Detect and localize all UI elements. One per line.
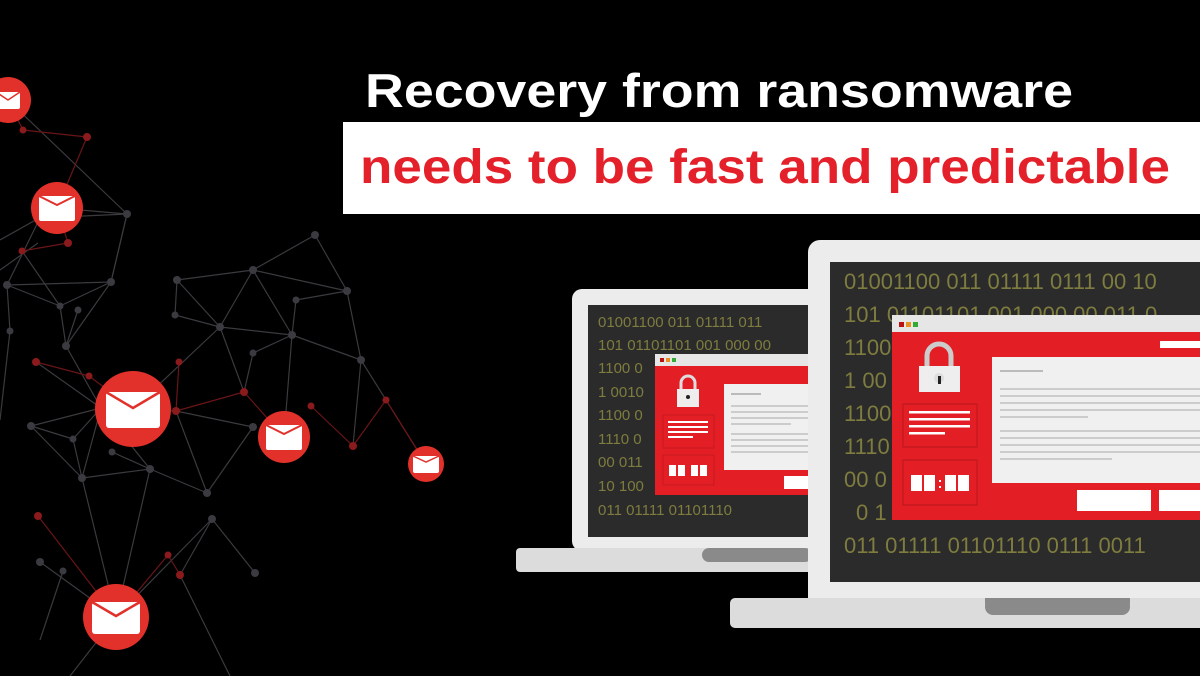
large ransom popup [892,315,1200,520]
small ransom popup [655,354,815,495]
subtitle banner: needs to be fast and predictable [360,141,1170,194]
large laptop: 101 01101101 001 000 00 011 0 [844,302,1157,327]
email icons [0,77,444,650]
large laptop: 1110 [844,434,890,459]
small laptop: 1 0010 [598,384,644,401]
small laptop: 101 01101101 001 000 00 [598,337,771,354]
large laptop: 1100 [844,335,891,360]
small laptop: 1110 0 [598,431,642,448]
large laptop: 1100 [844,401,891,426]
small laptop: 1100 0 [598,407,643,424]
large laptop: 01001100 011 01111 0111 00 10 [844,269,1157,294]
small laptop: 1100 0 [598,360,643,377]
small laptop: 011 01111 01101110 [598,502,732,519]
large laptop: 00 0 [844,467,887,492]
large laptop: 0 1 [856,500,887,525]
small laptop: 00 011 [598,454,643,471]
title: Recovery from ransomware [365,64,1073,117]
small laptop: 10 100 [598,478,644,495]
network graph [0,100,426,676]
subtitle banner [343,122,1200,214]
large laptop: 1 00 [844,368,887,393]
large laptop [730,240,1200,628]
small laptop [516,289,822,572]
large laptop: 011 01111 01101110 0111 0011 [844,533,1146,558]
small laptop: 01001100 011 01111 011 [598,314,762,331]
